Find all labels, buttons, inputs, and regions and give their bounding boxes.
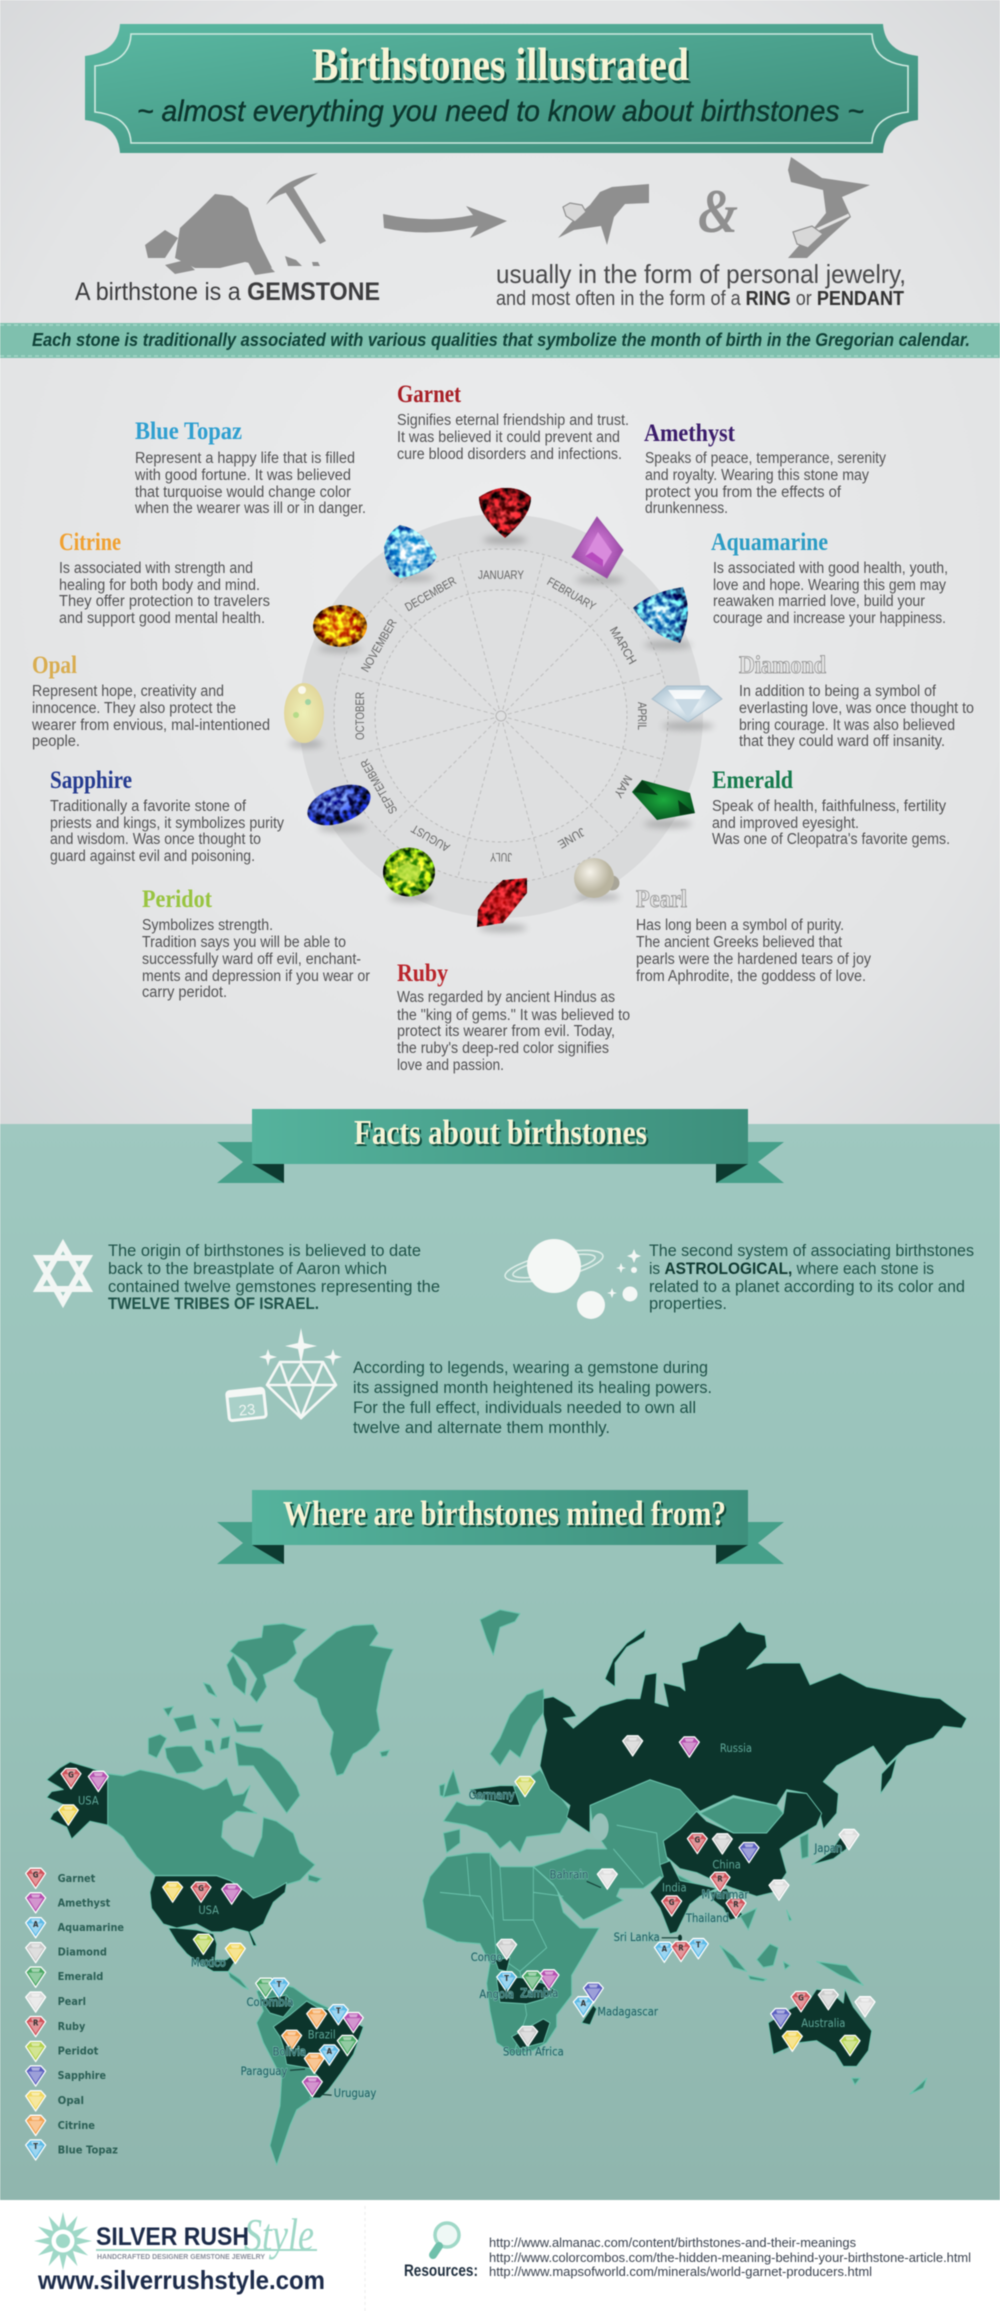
gem: garnet [479,488,531,544]
text: diamond: bring courage. It was also believed [739,717,955,734]
markers: mexico [193,1934,245,1964]
gem: pearl [574,858,620,900]
text: peridot: successfully ward off evil, enchant- [142,951,361,968]
congo [495,1958,510,1971]
text: emerald [712,767,950,848]
text: pearl [636,886,871,985]
footer logo: silver rush style: HANDCRAFTED DESIGNER GEMSTONE JEWELRY [97,2254,265,2261]
text: aquamarine: reawaken married love, build your [713,593,925,610]
markers: asia: R [678,1943,684,1953]
gem: aquamarine [633,587,692,649]
china [663,1792,822,1896]
text: blue topaz [134,418,366,517]
month wheel: OCTOBER [353,692,367,740]
fact: twelve tribes: contained twelve gemstones representing the [108,1277,440,1296]
text: ruby: Ruby [397,960,448,987]
gem: opal [284,683,324,748]
text: citrine: Citrine [59,529,121,556]
markers: australia: G [798,1993,804,2003]
fact: twelve tribes: TWELVE TRIBES OF ISRAEL. [108,1294,319,1313]
legend [26,1868,124,2160]
myanmar and thailand [710,1888,743,1920]
markers: south america [256,1978,363,2097]
text: garnet: It was believed it could prevent and [397,429,620,446]
logo star [34,2212,92,2270]
text: ruby: Was regarded by ancient Hindus as [397,989,615,1006]
brazil and bolivia [273,2001,363,2098]
markers: africa [497,1939,603,2047]
month wheel: APRIL [635,702,649,730]
markers: south america: T [277,1980,282,1989]
text: blue topaz: with good fortune. It was believed [134,467,351,484]
text: ruby: protect its wearer from evil. Today, [397,1023,615,1040]
northern islands [480,1610,520,1655]
text: aquamarine [711,529,948,627]
footer divider [364,2206,366,2311]
sri lanka [678,1935,682,1941]
month wheel: JUNE [555,825,588,851]
country labels: eastern hemisphere [469,1741,845,2059]
text: blue topaz: that turquoise would change color [135,484,351,501]
text: amethyst: drunkenness. [645,500,728,517]
text: sapphire: priests and kings, it symbolizes purity [50,815,284,832]
russia [540,1622,967,1833]
gem: peridot [383,848,435,902]
text: pearl: pearls were the hardened tears of joy [636,951,871,968]
arrow [383,206,507,238]
text: pearl: from Aphrodite, the goddess of love. [636,968,866,985]
icon: hand with ring [558,184,649,245]
resources links: http://www.colorcombos.com/the-hidden-meaning-behind-your-birthstone-article.html [489,2251,971,2265]
legend: Pearl [58,1996,86,2008]
text: aquamarine: Is associated with good health, youth, [713,560,948,577]
southeast asia islands [720,1908,927,2094]
gem: diamond [652,686,722,730]
text: pearl: Has long been a symbol of purity. [636,917,844,934]
icon: diamond and calendar [227,1328,342,1421]
markers: alaska: G [68,1770,74,1780]
month wheel: NOVEMBER [358,616,400,675]
fact: twelve tribes: back to the breastplate of Aaron which [108,1259,387,1278]
country labels: eastern hemisphere: Sri Lanka [614,1930,660,1944]
world map: americas [26,1623,393,2165]
footer logo: silver rush style: SILVER RUSH [96,2223,249,2251]
sakhalin [881,1758,897,1794]
country labels: americas: USA [198,1903,219,1917]
markers: africa: T [504,1973,510,1983]
text: emerald: Speak of health, faithfulness, fertility [712,798,946,815]
text: diamond: Diamond [739,652,826,679]
text: opal [31,652,270,750]
country labels: americas [78,1794,377,2100]
novaya zemlya [605,1629,646,1687]
caption: personal jewelry: and most often in the form of a RING or PENDANT [496,288,904,310]
text: garnet: Signifies eternal friendship and trust. [397,412,629,429]
markers: asia: G [669,1897,675,1907]
icon: diamond and calendar: 23 [238,1401,256,1420]
markers: south america: T [336,2006,341,2016]
text: opal: people. [32,733,80,750]
text: citrine [59,529,270,627]
text: emerald: Was one of Cleopatra's favorite gems. [712,831,950,848]
fact: astrological: related to a planet according to its color and [649,1277,965,1296]
usa [150,1876,287,1946]
icon: planets [503,1239,641,1319]
fact: legends: its assigned month heightened its healing powers. [353,1378,712,1397]
ribbon: where mined: Where are birthstones mined from? [285,1496,728,1535]
text: diamond: that they could ward off insanity. [739,733,945,750]
text: citrine: They offer protection to travelers [59,593,270,610]
fact: legends: twelve and alternate them monthly. [353,1418,610,1437]
world map: europe, africa, asia, oceania [423,1610,967,2094]
fact: astrological [649,1241,974,1313]
fact: twelve tribes [108,1241,440,1313]
text: peridot: Peridot [142,886,213,913]
south america [257,1983,363,2165]
legend: Opal [58,2095,84,2107]
australia [768,1989,872,2066]
fact: astrological: is ASTROLOGICAL, where each stone is [649,1259,934,1278]
markers: asia: R [733,1899,739,1909]
country labels: eastern hemisphere: China [712,1858,741,1872]
subtitle: ~ almost everything you need to know about birthstones ~ [137,95,864,128]
markers: asia: R [717,1874,723,1883]
text: blue topaz: Blue Topaz [135,418,242,445]
legend: Aquamarine [58,1922,124,1934]
india [650,1861,717,1934]
fact: legends: According to legends, wearing a gemstone during [353,1358,708,1377]
arctic islands [148,1623,389,1813]
gem: emerald [632,780,695,828]
icon: neck with pendant [788,157,870,258]
text: diamond [739,652,974,750]
angola and zambia [497,1977,557,2004]
korea [800,1833,808,1859]
legend: Garnet [58,1873,96,1885]
month wheel: AUGUST [408,821,452,855]
colombia [260,1995,293,2017]
country labels: americas: Mexico [191,1955,226,1970]
country labels: eastern hemisphere: Angola [479,1987,514,2001]
country labels: americas: Uruguay [334,2086,377,2100]
text: aquamarine: love and hope. Wearing this gem may [713,577,946,594]
canada [108,1770,315,1898]
europe [439,1689,572,1853]
greenland [293,1624,393,1776]
text: ruby: the "king of gems." It was believed to [397,1007,630,1024]
month wheel: SEPTEMBER [357,756,400,816]
ribbon: facts: Facts about birthstones [356,1115,649,1154]
markers: usa [163,1882,242,1904]
gem: ruby [477,878,527,932]
legend: T [33,2141,39,2151]
text: sapphire [50,767,284,865]
markers: asia [597,1829,859,1962]
mexico [168,1928,242,1971]
text: emerald: and improved eyesight. [712,815,859,832]
markers: asia: A [662,1944,667,1953]
text: peridot: ments and depression if you wear or [142,968,370,985]
legend: Sapphire [58,2070,106,2082]
country labels: americas: USA [78,1794,99,1808]
icon: magnifier [433,2223,459,2255]
text: amethyst: Amethyst [644,420,736,447]
resources label: Resources: [404,2261,478,2280]
gem: blue topaz [384,525,437,582]
fact: twelve tribes: The origin of birthstones is believed to date [108,1241,421,1260]
legend: G [33,1870,39,1880]
month wheel: FEBRUARY [545,574,598,613]
markers: asia: G [694,1835,700,1845]
title banner [85,24,918,153]
legend: Diamond [58,1947,107,1959]
text: citrine: Is associated with strength and [59,560,253,577]
country labels: eastern hemisphere: Madagascar [597,2005,658,2019]
icon: rock and pickaxe [145,173,326,275]
country labels: eastern hemisphere: Myanmar [702,1887,749,1902]
markers: usa: G [198,1884,204,1893]
country labels: americas: Colombia [247,1995,293,2009]
resources links [489,2236,971,2279]
text: opal: innocence. They also protect the [32,700,236,717]
text: diamond: everlasting love, was once thought to [739,700,974,717]
country labels: eastern hemisphere: Zambia [520,1986,558,2000]
caption: personal jewelry [496,259,906,310]
fact: astrological: The second system of associating birthstones [649,1241,974,1260]
markers: europe and russia [515,1736,699,1797]
south africa [512,2019,550,2049]
markers: south america: A [327,2047,332,2056]
month wheel: DECEMBER [402,573,459,614]
country labels: americas: Brazil [308,2028,336,2042]
gem: citrine [313,605,367,652]
text: pearl: Pearl [636,886,687,913]
footer logo: silver rush style [34,2209,317,2270]
country labels: eastern hemisphere: India [662,1881,687,1895]
footer url: www.silverrushstyle.com [37,2265,325,2295]
germany [470,1786,520,1805]
text: aquamarine: Aquamarine [711,529,828,556]
legend: Citrine [58,2120,95,2132]
legend: A [33,1919,38,1929]
country labels: eastern hemisphere: Russia [720,1741,752,1755]
ribbon: facts: Facts about birthstones [354,1113,647,1152]
africa [423,1853,599,2054]
month wheel: MAY [611,773,635,800]
country labels: eastern hemisphere: Bahrain [550,1868,588,1882]
country labels: eastern hemisphere: South Africa [503,2044,564,2059]
fact: astrological: properties. [649,1294,727,1313]
month wheel [299,514,703,918]
country labels: eastern hemisphere: Germany [469,1788,515,1802]
month wheel: JULY [490,850,512,864]
markers: australia [771,1990,875,2056]
markers: asia: T [696,1940,701,1950]
legend: Blue Topaz [58,2145,118,2157]
country labels: eastern hemisphere: Congo [471,1950,503,1964]
text: sapphire: guard against evil and poisoning. [50,848,255,865]
country labels: americas: Paraguay [241,2064,288,2078]
text: emerald: Emerald [712,767,793,794]
legend: Amethyst [58,1898,111,1910]
central america [228,1971,248,1989]
markers: africa: A [581,1998,586,2008]
background: grey upper section [0,0,1000,1124]
country labels: eastern hemisphere: Thailand [685,1911,729,1925]
text: amethyst: protect you from the effects of [645,484,842,501]
text: peridot: carry peridot. [142,984,227,1001]
icon: star of david [38,1245,88,1302]
title: Birthstones illustrated [312,39,689,91]
text: amethyst: and royalty. Wearing this stone may [645,467,869,484]
madagascar [582,2005,597,2025]
title: Birthstones illustrated [314,42,691,94]
legend: Peridot [58,2046,99,2058]
text: amethyst [644,420,886,517]
ribbon: where mined: Where are birthstones mined from? [283,1494,726,1533]
text: peridot [142,886,370,1001]
text: amethyst: Speaks of peace, temperance, serenity [645,450,886,467]
caption: personal jewelry: usually in the form of personal jewelry, [496,259,906,289]
ampersand: & [698,178,738,246]
text: opal: wearer from envious, mal-intentioned [31,717,270,734]
text: aquamarine: courage and increase your happiness. [713,610,946,627]
gem: amethyst [572,517,624,584]
text: blue topaz: Represent a happy life that is filled [135,450,355,467]
text: opal: Represent hope, creativity and [32,683,224,700]
text: ruby [397,960,630,1074]
fact: legends: For the full effect, individuals needed to own all [353,1398,696,1417]
alaska [47,1762,108,1839]
month wheel: JANUARY [478,568,524,582]
fact: legends [353,1358,712,1437]
footer logo: silver rush style: Style [244,2209,314,2260]
background: white footer [0,2200,1000,2311]
text: citrine: and support good mental health. [59,610,265,627]
markers: alaska [58,1769,108,1825]
text: opal: Opal [32,652,77,679]
text: citrine: healing for both body and mind. [59,577,260,594]
country labels: eastern hemisphere: Japan [813,1841,842,1855]
caption: gemstone: A birthstone is a GEMSTONE [75,278,380,306]
text: diamond: In addition to being a symbol of [739,683,937,700]
legend: Emerald [58,1971,103,1983]
text: garnet: Garnet [397,381,462,408]
japan [812,1833,847,1865]
background: teal lower section [0,1124,1000,2200]
text: ruby: love and passion. [397,1057,504,1074]
text: garnet: cure blood disorders and infections. [397,446,622,463]
resources links: http://www.mapsofworld.com/minerals/world-garnet-producers.html [489,2265,872,2279]
text: pearl: The ancient Greeks believed that [636,934,843,951]
text: peridot: Symbolizes strength. [142,917,273,934]
legend: Ruby [58,2021,86,2033]
ribbon: facts [217,1109,784,1183]
central asia and middle east [533,1780,783,1920]
month wheel: MARCH [607,624,639,667]
text: blue topaz: when the wearer was ill or in danger. [134,500,366,517]
teal info strip [0,323,1000,358]
country labels: americas: Bolivia [273,2044,306,2059]
text: sapphire: Sapphire [50,767,132,794]
ribbon: where mined [217,1490,784,1564]
country labels: eastern hemisphere: Australia [801,2016,845,2030]
resources links: http://www.almanac.com/content/birthstones-and-their-meanings [489,2236,856,2250]
gem: sapphire [302,777,376,833]
text: sapphire: and wisdom. Was once thought to [50,831,261,848]
text: peridot: Tradition says you will be able to [142,934,346,951]
text: garnet [397,381,629,463]
legend: R [33,2018,38,2028]
text: ruby: the ruby's deep-red color signifies [397,1040,609,1057]
text: sapphire: Traditionally a favorite stone of [50,798,247,815]
